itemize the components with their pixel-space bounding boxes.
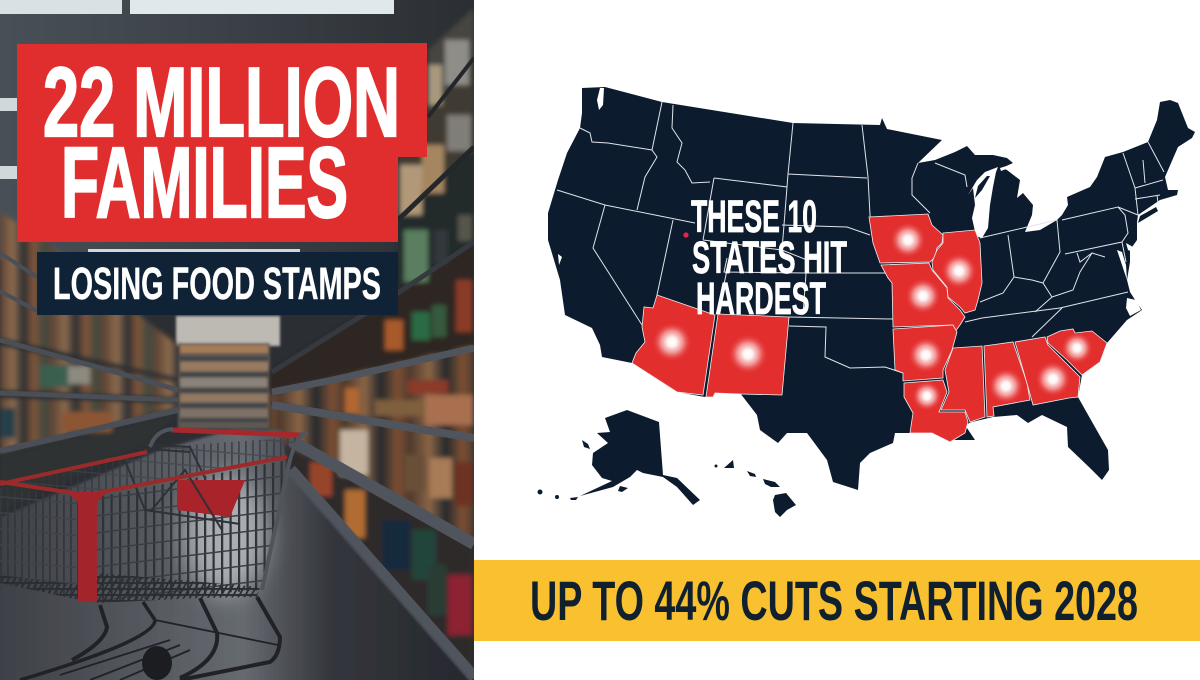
- map heading: THESE 10: [691, 191, 817, 242]
- cart wire walls: [97, 460, 287, 603]
- ceiling: [0, 0, 374, 260]
- Alaska: [538, 410, 700, 505]
- cart back basket: [18, 438, 296, 492]
- state: Illinois: [932, 230, 982, 313]
- child seat wires: [118, 443, 240, 530]
- state: Arizona: [632, 295, 715, 395]
- bright floor reflection: [183, 475, 267, 595]
- subheading navy bar: [37, 252, 398, 315]
- grey handle frame: [150, 429, 308, 590]
- state: Alabama: [984, 342, 1030, 417]
- state: Iowa: [869, 214, 943, 263]
- state: Missouri: [881, 263, 965, 332]
- shopping cart: [0, 429, 308, 680]
- Great Lakes and coastal water: [558, 88, 1141, 316]
- state: Mississippi: [941, 346, 985, 422]
- dark base: [0, 260, 474, 680]
- headline line 1: 22 MILLION: [43, 47, 400, 157]
- floor: [0, 430, 474, 680]
- highlighted states: [632, 214, 1107, 442]
- headline line 2: FAMILIES: [61, 127, 348, 239]
- left shelf edges: [0, 253, 178, 451]
- red seat flap: [177, 480, 245, 517]
- ceiling lights: [0, 0, 394, 253]
- cart legs and bottom rack: [20, 597, 280, 680]
- subheading text: LOSING FOOD STAMPS: [53, 258, 381, 309]
- contiguous states landmass: [548, 87, 1195, 490]
- Hawaii: [714, 460, 796, 517]
- small red marker: [683, 232, 689, 238]
- state borders: [557, 102, 1164, 373]
- far end of aisle: [176, 316, 280, 429]
- state: Arkansas: [893, 325, 957, 381]
- right shelves: [270, 8, 474, 673]
- map heading: HARDEST: [696, 273, 826, 324]
- state: Louisiana: [904, 380, 968, 442]
- red rim: [0, 452, 287, 495]
- US map: [538, 87, 1195, 517]
- red handle: [173, 430, 300, 435]
- right shelf edges: [272, 58, 474, 678]
- products on shelves: [400, 165, 422, 215]
- Long Island: [1138, 207, 1158, 223]
- yellow banner: [474, 560, 1200, 641]
- map heading: [691, 191, 847, 324]
- state: South Carolina: [1047, 329, 1107, 375]
- left shelves: [0, 212, 180, 454]
- panel: supermarket aisle photo: [0, 0, 474, 680]
- map heading: STATES HIT: [692, 232, 847, 283]
- headline red block: [17, 43, 427, 242]
- cart wheel: [142, 646, 172, 680]
- Door peninsula: [975, 176, 990, 198]
- red corner post: [66, 492, 107, 602]
- glowing hotspots: [652, 222, 1093, 411]
- state: New Mexico: [706, 314, 789, 397]
- state: Georgia: [1015, 337, 1080, 405]
- cart basket floor: [97, 573, 260, 603]
